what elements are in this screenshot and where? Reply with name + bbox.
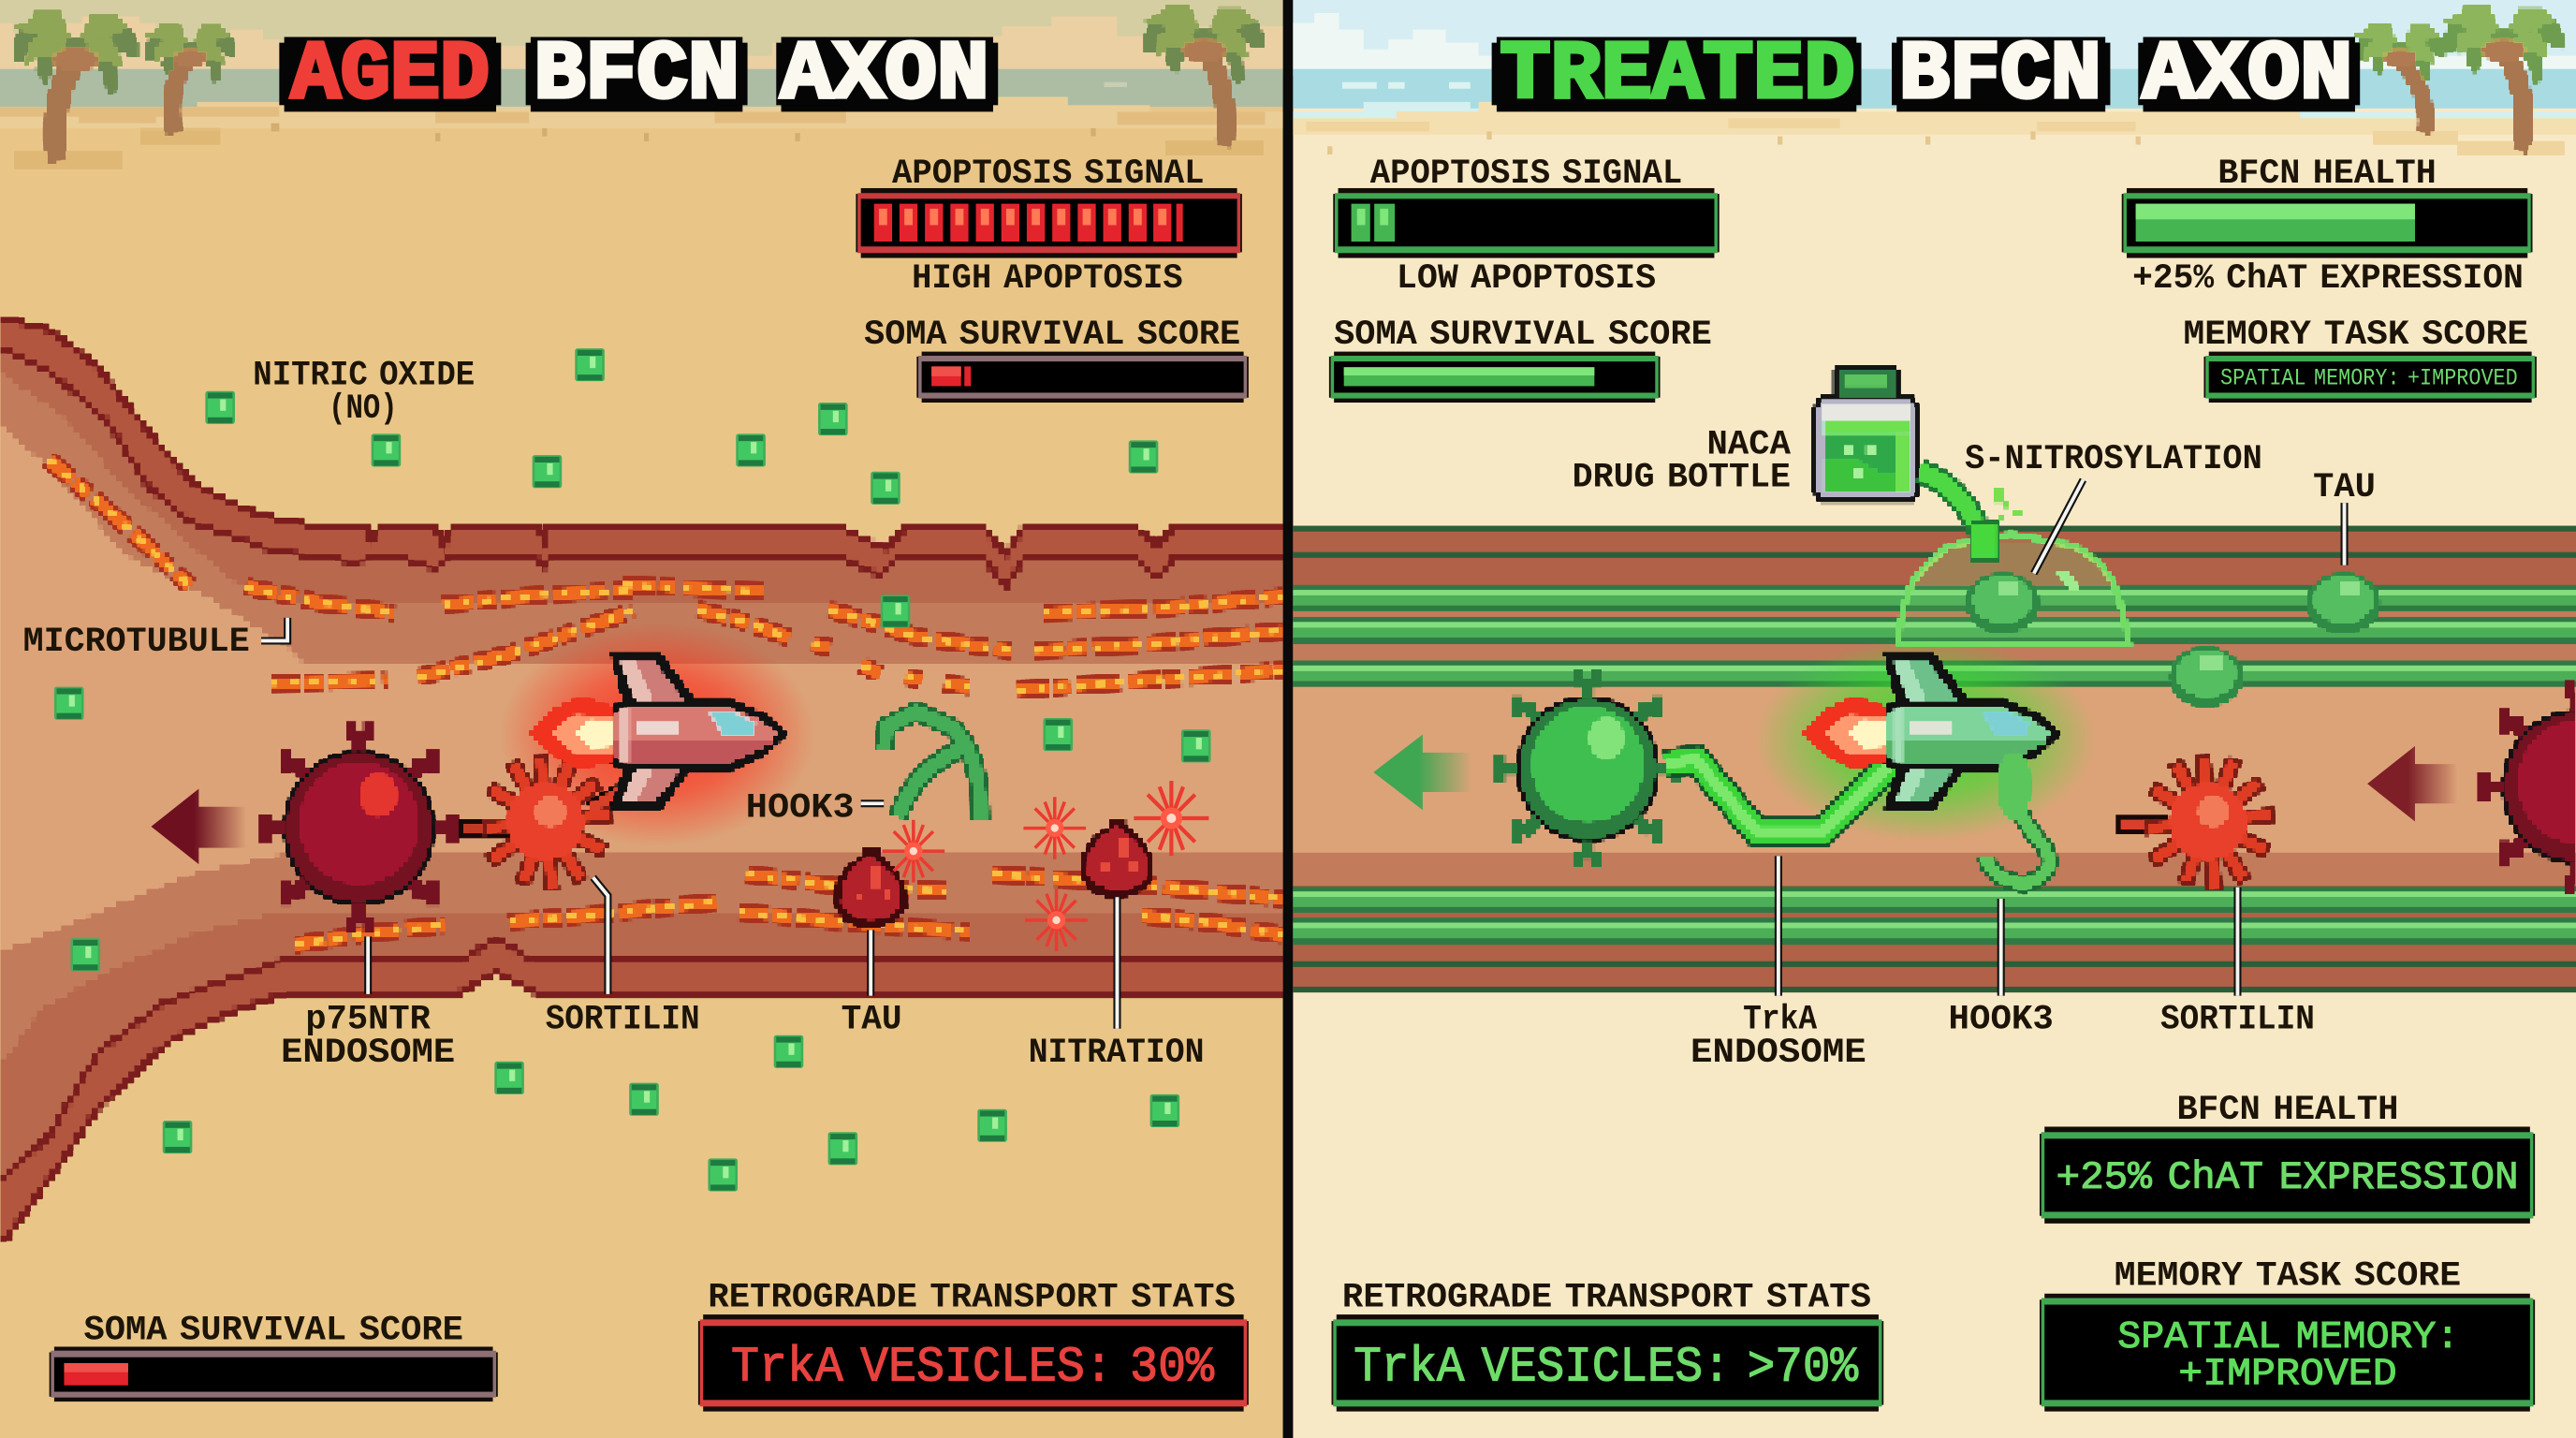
- title: AGED BFCN AXON: BFCN: [534, 30, 739, 123]
- hook3 aged: [884, 712, 981, 818]
- nitration sparks: [882, 781, 1208, 951]
- palm tree left 2: [139, 23, 236, 143]
- vesicle glow treated: [1754, 638, 2097, 842]
- TrkA endosome: [1495, 670, 1680, 868]
- axon tube aged: [0, 317, 1290, 1240]
- stat box: TrkA vesicles over 70%: TrkA VESICLES: >70%: [1354, 1339, 1858, 1395]
- spaceship vesicle aged: [529, 654, 787, 810]
- leader lines treated: [1778, 479, 2345, 996]
- beach scenery: [1293, 0, 2576, 154]
- label: tau: TAU: [842, 1001, 902, 1040]
- label: nitric oxide: (NO): [329, 389, 398, 429]
- center divider: [1283, 0, 1293, 1438]
- label: nitric oxide: NITRIC OXIDE: [253, 357, 475, 396]
- label: p75NTR endosome: ENDOSOME: [281, 1034, 455, 1073]
- retrograde arrow dark red: [2367, 746, 2458, 822]
- panel: treated BFCN axon: [1293, 0, 2576, 1438]
- label: naca drug bottle: [1573, 425, 1792, 498]
- p75NTR endosome partial: [2479, 682, 2576, 892]
- palm tree left 3: [1145, 5, 1264, 156]
- leader lines aged: [368, 877, 1117, 1029]
- label: BFCN health top: BFCN HEALTH: [2217, 154, 2437, 194]
- tau nitration aggregate: [1081, 818, 1153, 897]
- drug flow into axon: [1921, 472, 2021, 562]
- title: TREATED BFCN AXON: [1492, 30, 2360, 123]
- label: apoptosis signal: APOPTOSIS SIGNAL: [892, 154, 1204, 194]
- panel: aged BFCN axon: [0, 0, 1290, 1438]
- label: soma survival score lower: SOMA SURVIVAL SCORE: [84, 1311, 463, 1350]
- axon tube treated: [1293, 526, 2576, 992]
- label: apoptosis signal treated: APOPTOSIS SIGNAL: [1370, 154, 1682, 194]
- title: AGED BFCN AXON: AGED: [291, 30, 490, 123]
- bar: BFCN health: [2122, 188, 2532, 258]
- stat box: spatial memory improved: SPATIAL MEMORY:: [2117, 1316, 2459, 1359]
- label: naca drug bottle: DRUG BOTTLE: [1573, 459, 1791, 498]
- panel background sand: [0, 0, 1283, 1438]
- label: soma survival score treated: SOMA SURVIVAL SCORE: [1334, 315, 1712, 355]
- title: AGED BFCN AXON: AXON: [781, 30, 989, 123]
- TrkA link to vesicle: [1666, 759, 1891, 831]
- label: naca drug bottle: NACA: [1707, 425, 1792, 464]
- label: BFCN health lower: BFCN HEALTH: [2177, 1091, 2398, 1130]
- label: hook3 aged: HOOK3: [746, 788, 855, 828]
- box: spatial memory small: SPATIAL MEMORY: +IMPROVED: [2220, 367, 2518, 392]
- label: chat expression top: +25% ChAT EXPRESSION: [2132, 259, 2524, 299]
- label: high apoptosis: HIGH APOPTOSIS: [912, 259, 1183, 299]
- label: sortilin: SORTILIN: [546, 1001, 700, 1040]
- label: p75NTR endosome: [281, 1001, 455, 1073]
- label: hook3 treated: HOOK3: [1949, 1001, 2054, 1040]
- bar: apoptosis signal high: [856, 188, 1242, 258]
- label: nitration: NITRATION: [1029, 1034, 1204, 1073]
- bar: soma survival low lower: [50, 1346, 498, 1401]
- title: TREATED BFCN AXON: AXON: [2143, 30, 2352, 123]
- title: AGED BFCN AXON: [279, 37, 998, 112]
- vesicle glow: [500, 623, 815, 846]
- title: TREATED BFCN AXON: TREATED: [1500, 30, 1855, 123]
- label: nitric oxide: [255, 361, 474, 425]
- retrograde arrow red: [151, 788, 246, 864]
- label: TrkA endosome: TrkA: [1743, 1001, 1818, 1040]
- stat box: TrkA vesicles over 70%: [1332, 1314, 1883, 1412]
- sortilin treated: [2117, 756, 2274, 890]
- microtubule fragments: [50, 460, 1281, 945]
- panel background sand: [1293, 0, 2576, 1438]
- bar: apoptosis signal low: [1333, 188, 1720, 258]
- spaceship vesicle treated: [1802, 654, 2060, 810]
- label: s-nitrosylation: S-NITROSYLATION: [1965, 440, 2262, 479]
- label: low apoptosis: LOW APOPTOSIS: [1397, 259, 1656, 299]
- healthy microtubules: [1293, 585, 2576, 945]
- stat box: ChAT expression: [2040, 1126, 2535, 1224]
- label: soma survival score upper: SOMA SURVIVAL SCORE: [864, 315, 1240, 355]
- p75NTR endosome: [260, 723, 458, 933]
- palm tree right 1: [2355, 23, 2456, 143]
- NACA drug bottle: [1812, 365, 1921, 503]
- label: TrkA endosome: [1690, 1001, 1866, 1073]
- label: memory task score top: MEMORY TASK SCORE: [2184, 315, 2528, 355]
- label: sortilin treated: SORTILIN: [2160, 1001, 2315, 1040]
- label: memory task score lower: MEMORY TASK SCORE: [2115, 1256, 2461, 1296]
- bar: soma survival low upper: [916, 352, 1249, 403]
- stat box: TrkA vesicles 30%: [698, 1314, 1249, 1412]
- label: retrograde transport stats aged: RETROGRADE TRANSPORT STATS: [708, 1278, 1236, 1317]
- nitric oxide molecules: [54, 348, 1211, 1191]
- label: retrograde transport stats treated: RETROGRADE TRANSPORT STATS: [1342, 1278, 1871, 1317]
- label: tau treated: TAU: [2313, 468, 2376, 507]
- stat box: ChAT expression: +25% ChAT EXPRESSION: [2056, 1155, 2519, 1200]
- bar: soma survival high: [1329, 352, 1661, 403]
- healthy tau proteins: [1967, 574, 2379, 707]
- beach scenery: [0, 0, 1283, 141]
- sortilin: [460, 756, 631, 890]
- box: spatial memory small: [2203, 352, 2537, 403]
- hook3 treated: [1986, 753, 2049, 884]
- retrograde arrow green: [1373, 735, 1472, 810]
- stat box: spatial memory improved: [2040, 1294, 2535, 1412]
- s-nitrosylation dome: [1897, 534, 2130, 644]
- label: microtubule: MICROTUBULE: [23, 623, 250, 662]
- title: TREATED BFCN AXON: BFCN: [1899, 30, 2101, 123]
- tau aggregate: [835, 848, 907, 927]
- label: TrkA endosome: ENDOSOME: [1690, 1034, 1866, 1073]
- stat box: TrkA vesicles 30%: TrkA VESICLES: 30%: [731, 1339, 1214, 1395]
- palm tree left 1: [13, 11, 138, 169]
- palm tree right 2: [2444, 5, 2563, 156]
- stat box: spatial memory improved: +IMPROVED: [2178, 1354, 2397, 1397]
- label: p75NTR endosome: p75NTR: [305, 1001, 432, 1040]
